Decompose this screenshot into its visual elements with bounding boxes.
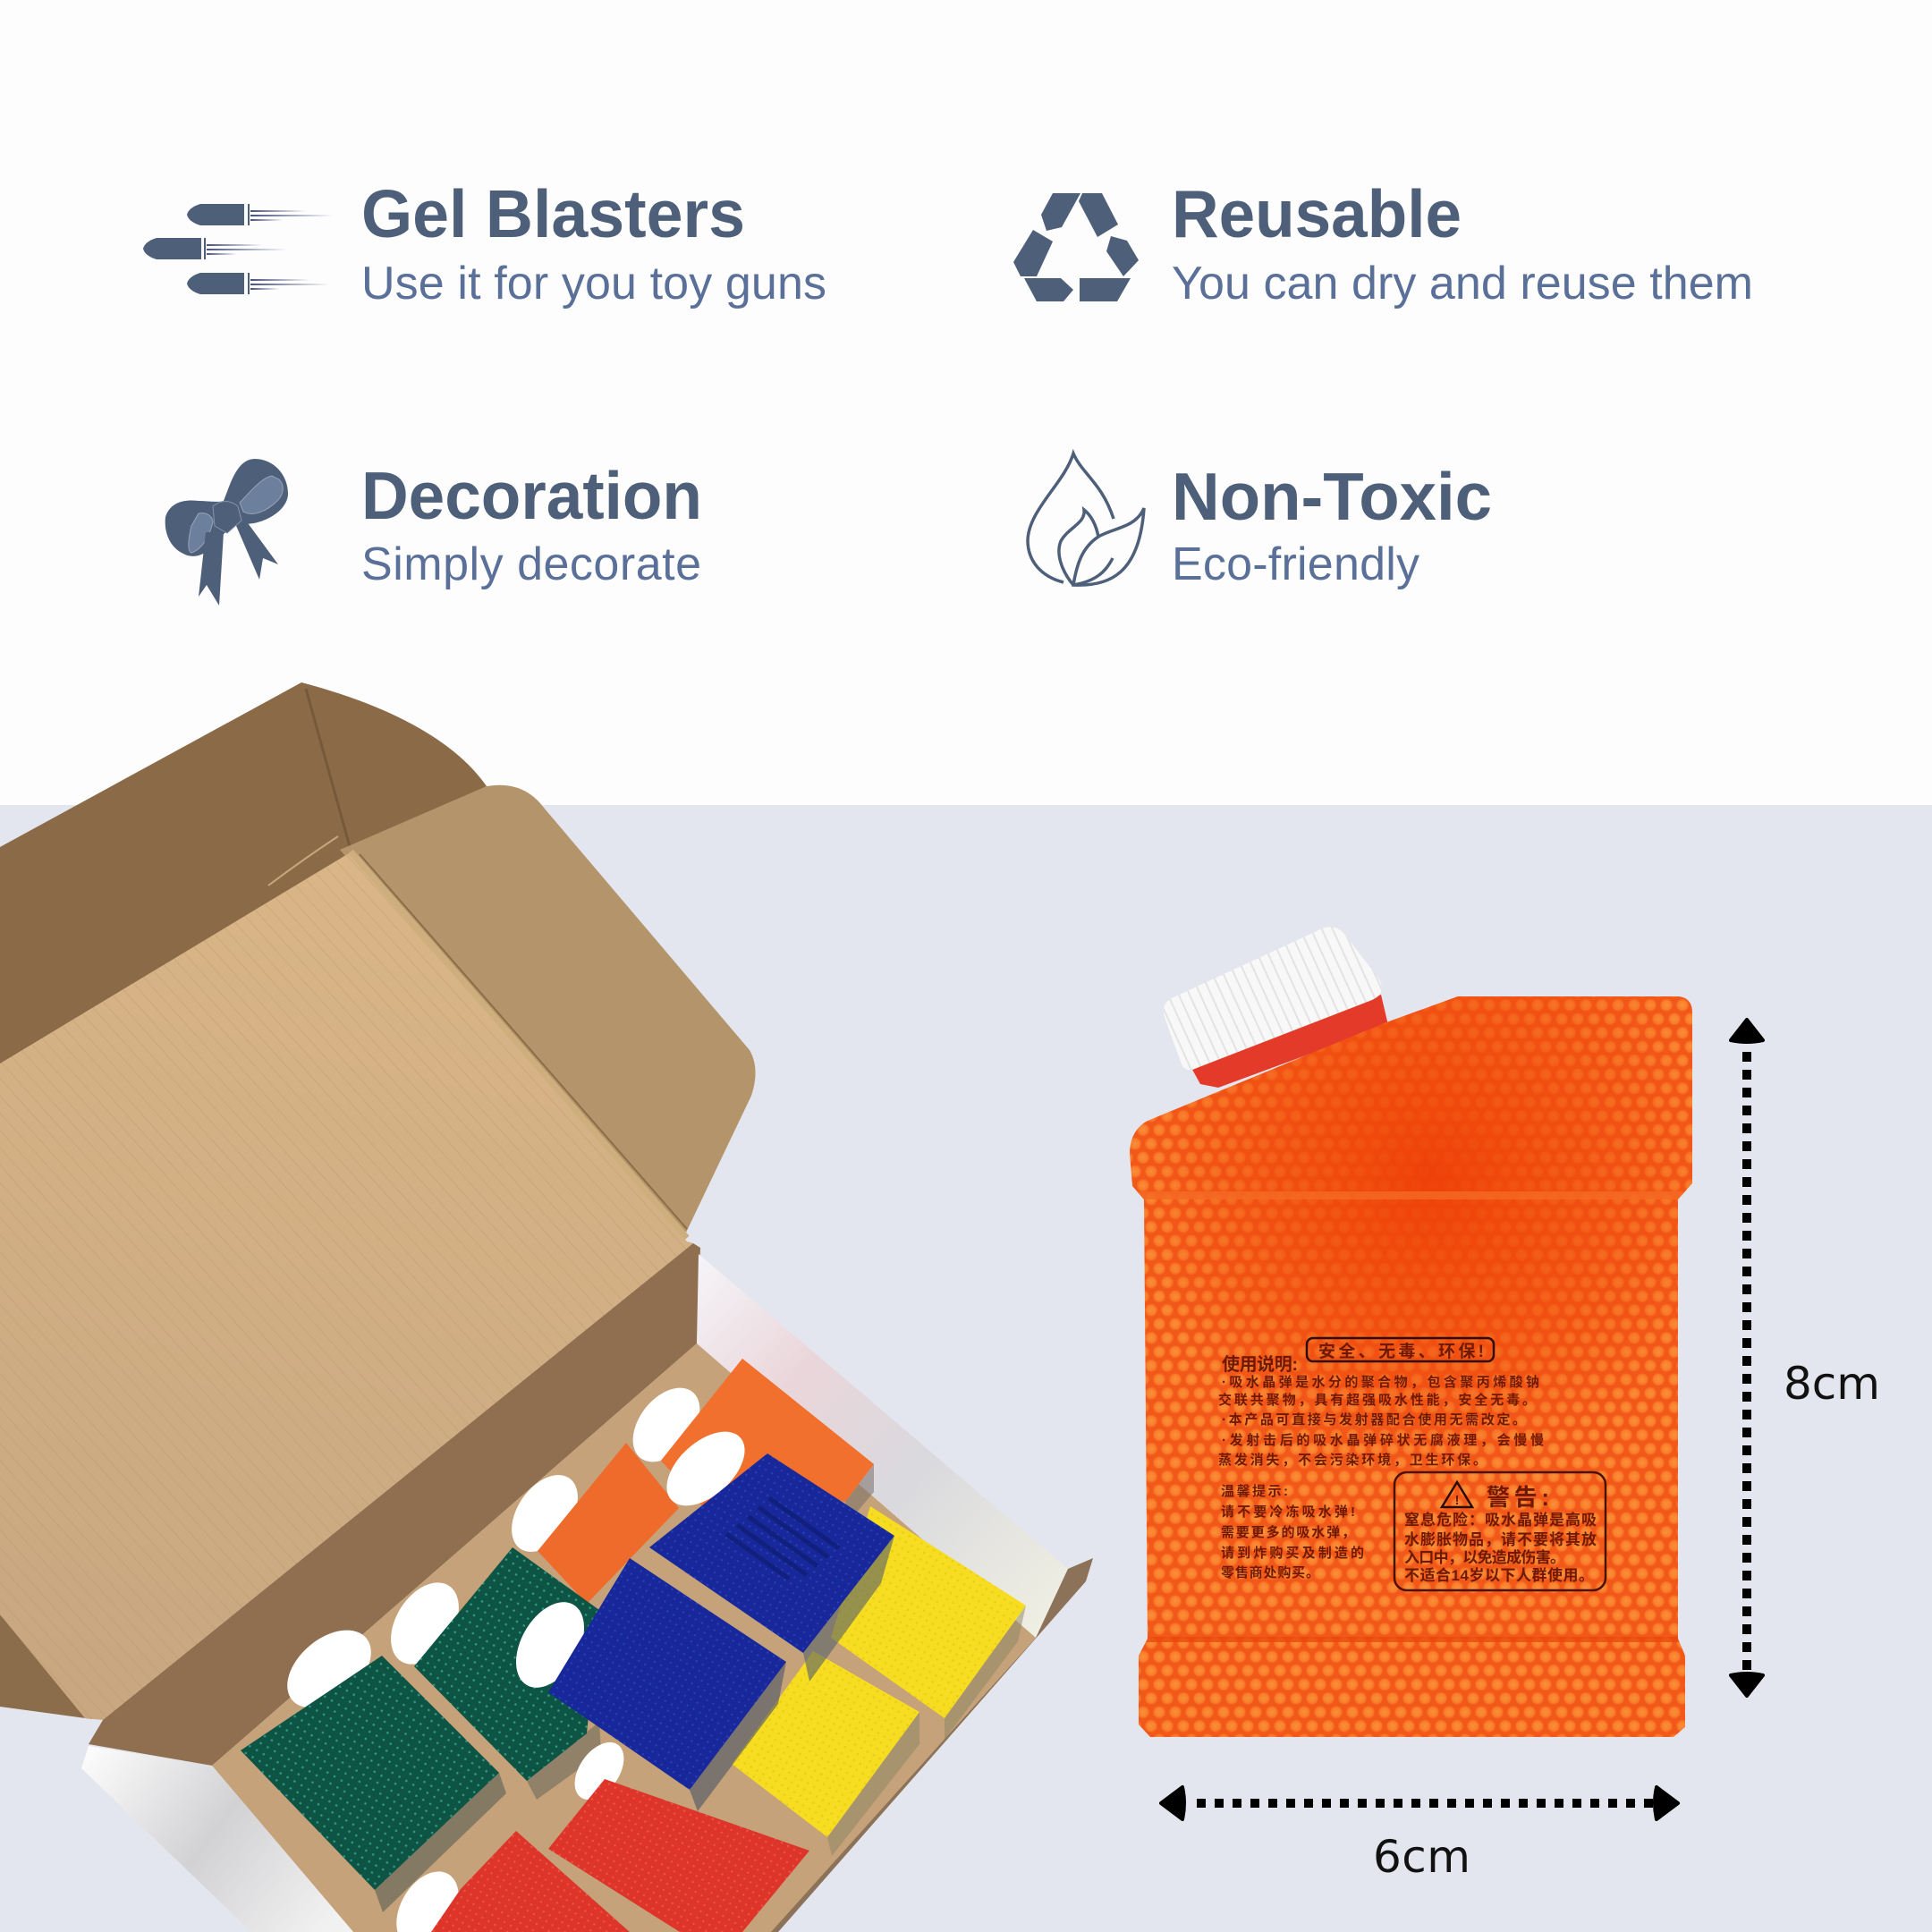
feature: decoration (165, 458, 702, 606)
label: warning box: 窒息危险：吸水晶弹是高吸 (1404, 1511, 1597, 1529)
arrow: height dimension (1731, 1020, 1763, 1696)
bottle: green front (241, 1614, 506, 1912)
label: instructions: ·吸水晶弹是水分的聚合物，包含聚丙烯酸钠 (1222, 1374, 1539, 1390)
label: instructions (1218, 1354, 1544, 1468)
label: instructions: 蒸发消失，不会污染环境，卫生环保。 (1218, 1452, 1487, 1468)
box: small lower flap (0, 1614, 92, 1719)
label: instructions: ·本产品可直接与发射器配合使用无需改定。 (1222, 1411, 1526, 1428)
bottle: blue back (649, 1418, 894, 1682)
bottle: yellow front (732, 1651, 919, 1856)
feature: gel blasters (143, 176, 826, 309)
box: white left wall (81, 1746, 353, 1932)
box: side flap (340, 785, 756, 1252)
label: tips: 温馨提示: (1221, 1484, 1288, 1499)
label: instructions: ·发射击后的吸水晶弹碎状无腐液理，会慢慢 (1222, 1432, 1544, 1448)
label: slogan: 安全、无毒、环保! (1318, 1341, 1484, 1361)
arrow: width dimension (1161, 1787, 1678, 1819)
bottle: red front (384, 1831, 630, 1932)
text: gel blasters description: Use it for you toy guns (361, 258, 826, 309)
label: warning box: 警告: (1487, 1484, 1549, 1511)
label: warning box (1394, 1472, 1606, 1590)
label: tips (1221, 1484, 1364, 1580)
background: upper white area (0, 0, 1932, 805)
label: instructions: 使用说明: (1222, 1354, 1298, 1375)
bottle: blue front (502, 1558, 786, 1811)
background: lower grey panel (0, 805, 1932, 1932)
heading: reusable: Reusable (1172, 176, 1462, 251)
text: decoration description: Simply decorate (361, 538, 701, 590)
bottle label: printed text (1218, 1338, 1606, 1590)
label: warning box: 水膨胀物品，请不要将其放 (1404, 1531, 1597, 1548)
icon: flying bullets (143, 204, 333, 294)
label: warning box: 入口中，以免造成伤害。 (1404, 1548, 1565, 1566)
text: reusable description: You can dry and reuse them (1172, 258, 1753, 309)
label: 6cm: 6cm (1373, 1831, 1470, 1883)
product: single orange bottle (1123, 927, 1704, 1744)
label: tips: 零售商处购买。 (1221, 1564, 1319, 1580)
feature: reusable (1013, 176, 1753, 309)
label: instructions: 交联共聚物，具有超强吸水性能，安全无毒。 (1218, 1392, 1536, 1408)
bottle body with beads (1123, 984, 1704, 1744)
feature: non-toxic (1028, 453, 1492, 590)
icon: drop and leaf (1028, 453, 1144, 585)
icon: ribbon bow (165, 459, 288, 606)
box: floor (212, 1343, 1036, 1932)
bottle: green back (377, 1547, 601, 1800)
icon: recycle (1013, 193, 1139, 301)
bottle: orange second (498, 1359, 874, 1604)
text: non-toxic description: Eco-friendly (1172, 538, 1419, 590)
bottle: red back (548, 1733, 809, 1932)
bottle cap (1164, 927, 1382, 1070)
label: tips: 请不要冷冻吸水弹! (1221, 1504, 1355, 1520)
bottle neck (1191, 995, 1388, 1088)
box: inner wall (89, 1243, 700, 1766)
box: outer end flap (769, 1558, 1093, 1932)
bottle: yellow back (831, 1506, 1026, 1740)
label: warning box: ! (1454, 1493, 1460, 1508)
label: 8cm: 8cm (1784, 1358, 1880, 1410)
label: tips: 请到炸购买及制造的 (1221, 1545, 1364, 1561)
box: white right wall (697, 1254, 1068, 1638)
label: warning box: 不适合14岁以下人群使用。 (1404, 1566, 1594, 1584)
heading: non-toxic: Non-Toxic (1172, 459, 1492, 534)
product photo: open cardboard box of bottles (0, 682, 1093, 1932)
box: inner lid (0, 852, 693, 1720)
box: back flap (0, 682, 487, 1069)
heading: gel blasters: Gel Blasters (361, 176, 745, 251)
label: tips: 需要更多的吸水弹， (1221, 1524, 1355, 1540)
heading: decoration: Decoration (361, 458, 702, 533)
bottle: orange back (619, 1359, 874, 1521)
